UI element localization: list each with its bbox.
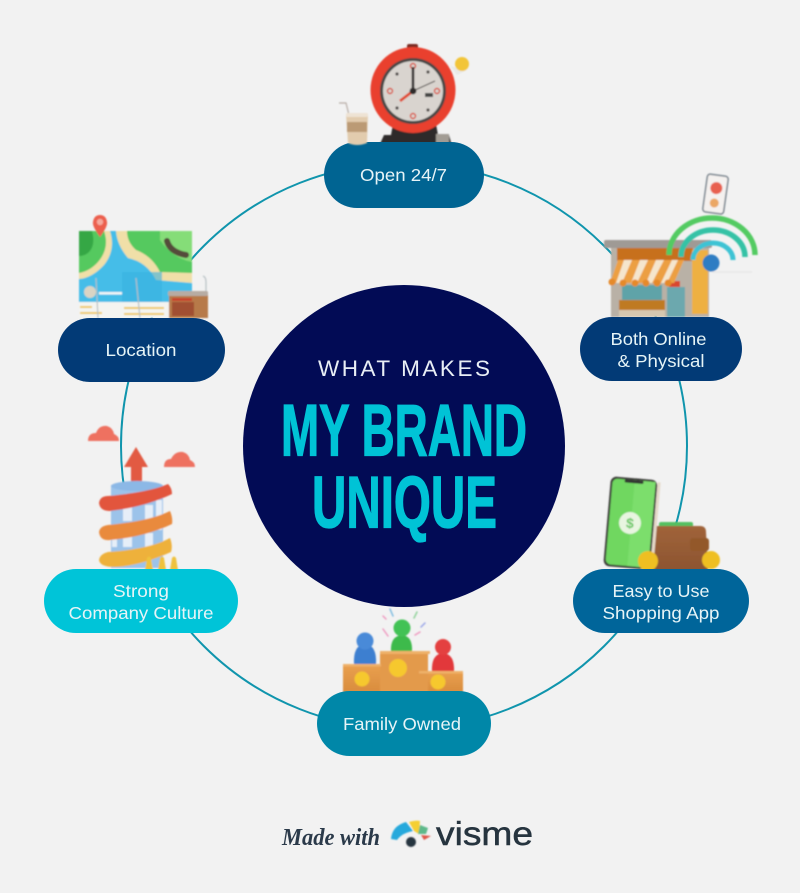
footer: made with visme: visme [436, 815, 533, 852]
footer: made with visme: Made with [281, 825, 380, 851]
icon: visme logo [391, 821, 431, 847]
pill: location [58, 318, 225, 382]
title: my brand unique [281, 390, 527, 544]
subtitle: what makes: WHAT MAKES [318, 356, 490, 381]
icon: phone and wallet: $ [625, 515, 635, 531]
icon: winners podium [343, 609, 463, 692]
central circle [243, 285, 565, 607]
icon: coffee cup [339, 103, 368, 145]
pill: strong company culture: Strong [113, 581, 169, 601]
title: my brand unique: UNIQUE [312, 462, 497, 544]
pill: family owned: Family Owned [343, 714, 461, 734]
pill: strong company culture [44, 569, 238, 633]
footer: made with visme [281, 815, 533, 852]
pill: both online and physical [580, 317, 742, 381]
pill: easy to use shopping app [573, 569, 749, 633]
icon: alarm clock with coffee [370, 44, 469, 146]
pill: open 24/7: Open 24/7 [360, 165, 447, 185]
pill: both online and physical: Both Online [610, 329, 706, 349]
pill: easy to use shopping app: Shopping App [602, 603, 720, 623]
pill: location: Location [106, 340, 176, 360]
pill: open 24/7 [324, 142, 484, 208]
icon: building with rising arrow [88, 426, 195, 570]
title: my brand unique: MY BRAND [281, 390, 527, 472]
pill: both online and physical: & Physical [618, 351, 704, 371]
icon: map with pin [79, 215, 208, 318]
icon: phone and wallet [603, 476, 720, 571]
icon: shop with wifi [604, 174, 755, 317]
pill: strong company culture: Company Culture [68, 603, 214, 623]
ring connecting the six features [121, 163, 687, 729]
pill: easy to use shopping app: Easy to Use [612, 581, 710, 601]
pill: family owned [317, 691, 491, 756]
